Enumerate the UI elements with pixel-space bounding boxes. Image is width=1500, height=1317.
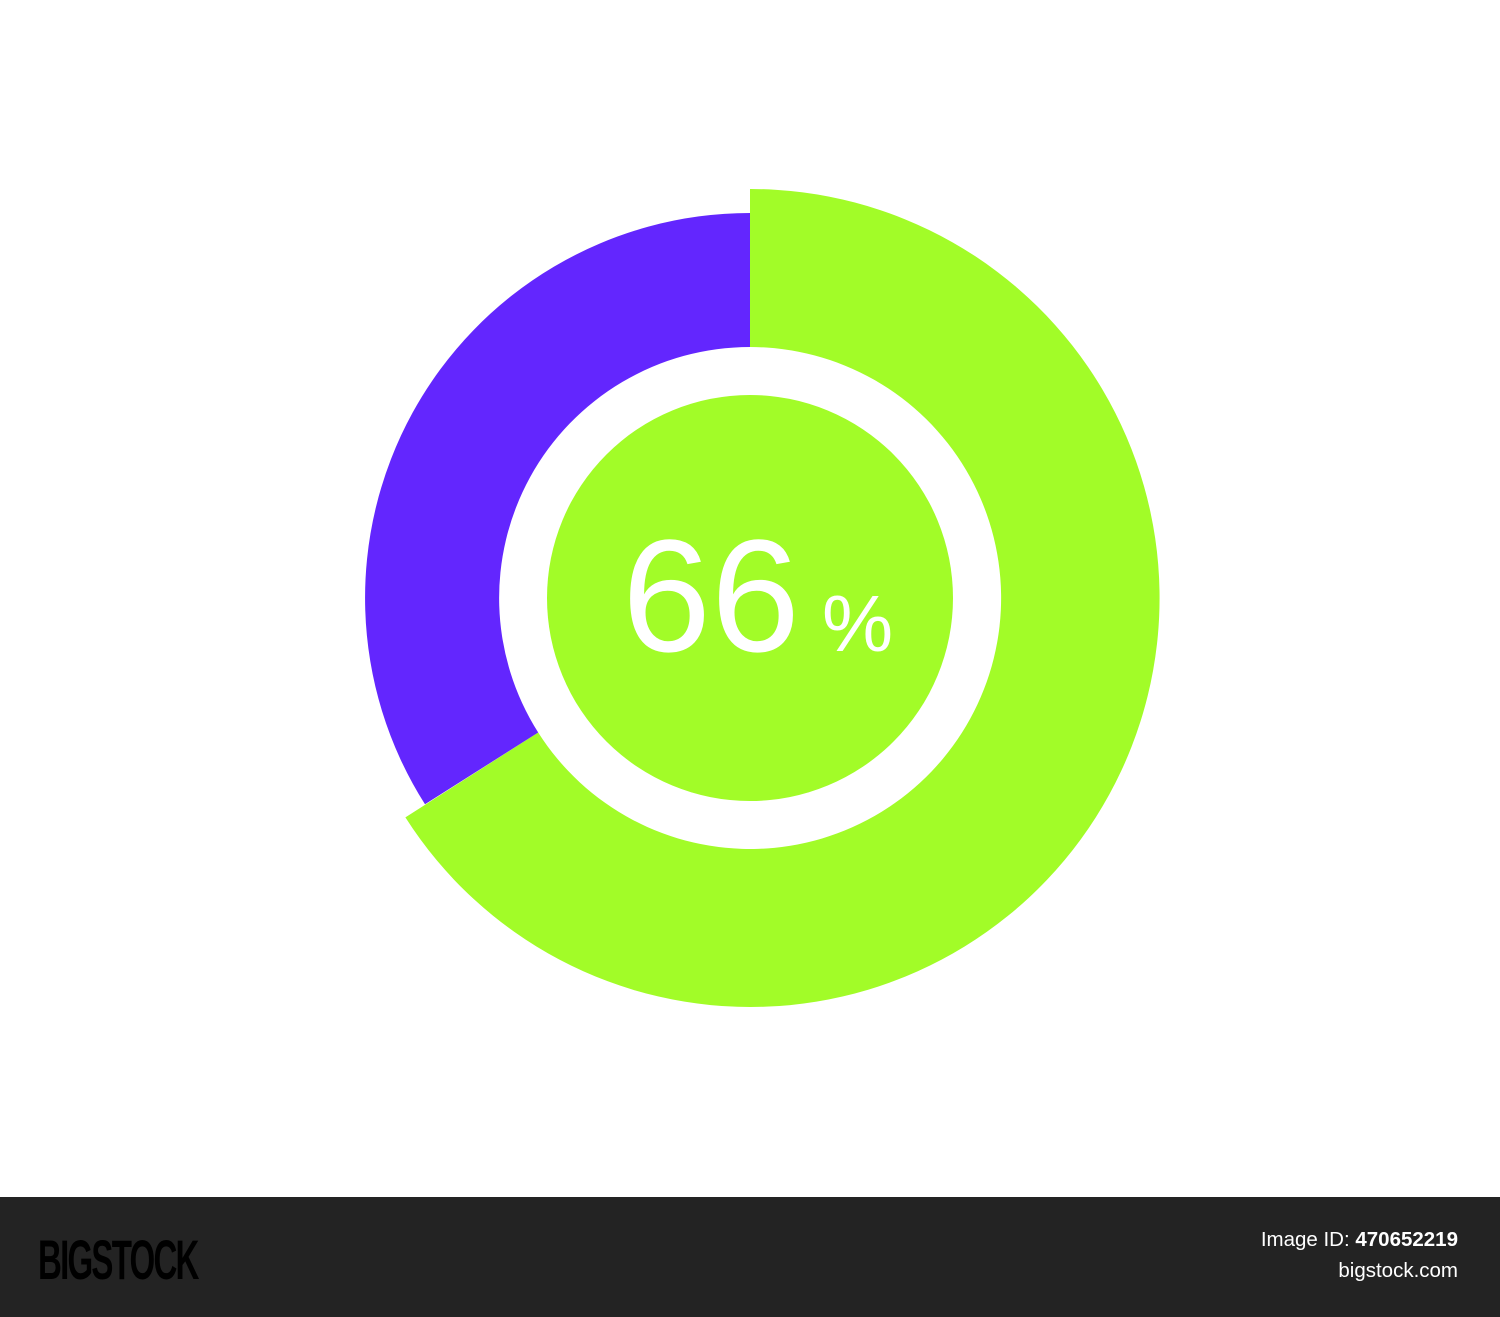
footer image id [1261, 1228, 1458, 1282]
percentage label: 66 [622, 506, 800, 685]
green arc segment 66% [405, 189, 1160, 1007]
center circle [547, 395, 953, 801]
footer logo: BIGSTOCK [38, 1228, 198, 1291]
footer bar [0, 1197, 1500, 1317]
percentage label [622, 506, 893, 685]
footer image id: Image ID: 470652219 [1261, 1228, 1458, 1251]
percentage label: % [822, 579, 893, 668]
purple arc segment 34% [365, 213, 750, 804]
footer image id: bigstock.com [1338, 1259, 1458, 1282]
